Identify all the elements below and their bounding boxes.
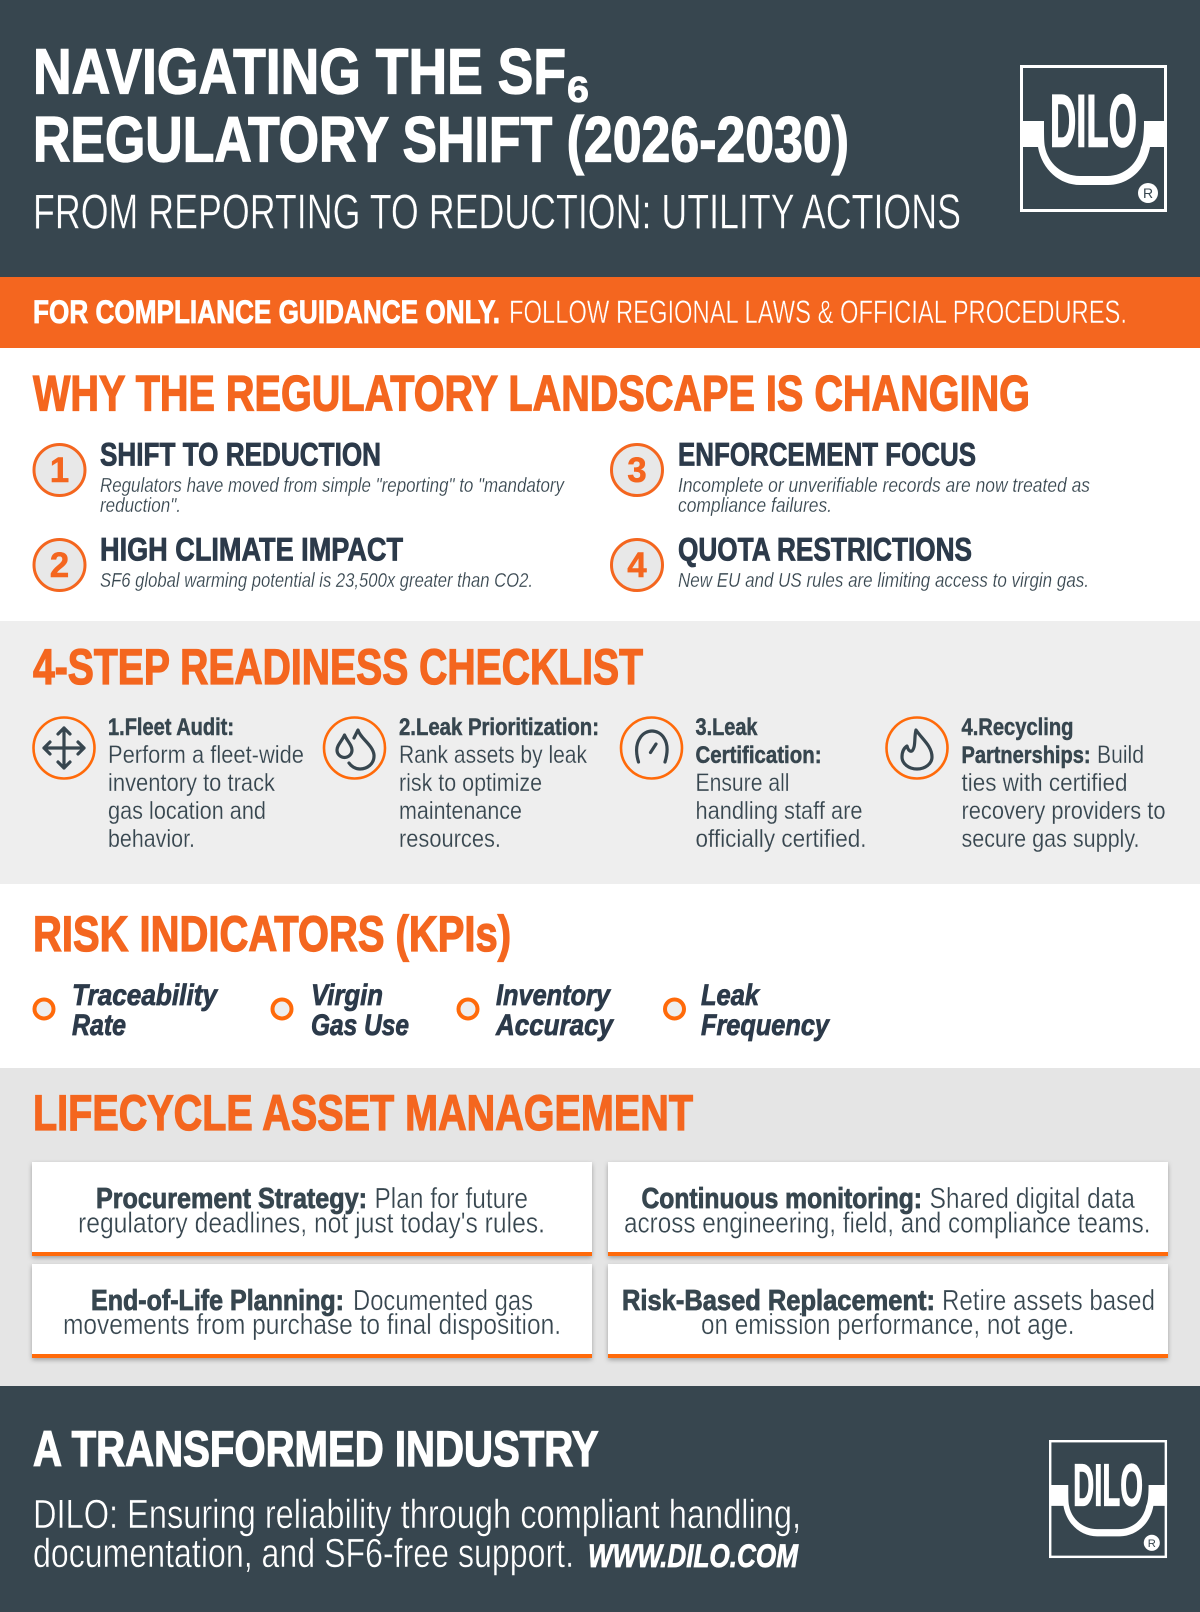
title xyxy=(33,36,849,176)
icon: gauge xyxy=(637,731,667,762)
footer heading: A TRANSFORMED INDUSTRY xyxy=(33,1421,598,1477)
card: risk-based replacement: on emission performance, not age. xyxy=(701,1309,1074,1341)
item 2 xyxy=(34,532,533,592)
item 4: QUOTA RESTRICTIONS xyxy=(678,532,972,568)
panel: risk indicators xyxy=(0,884,1200,1068)
step 1: gas location and xyxy=(108,797,266,825)
panel: footer xyxy=(0,1386,1200,1612)
card: continuous monitoring xyxy=(608,1162,1168,1256)
card: procurement strategy: Procurement Strategy: xyxy=(96,1183,367,1215)
item 1: Regulators have moved from simple "reporting" to "mandatory xyxy=(100,475,565,497)
item 1: 1 xyxy=(50,451,69,490)
step 4: ties with certified xyxy=(962,769,1128,797)
card: risk-based replacement xyxy=(608,1264,1168,1358)
card: end-of-life planning: Documented gas xyxy=(353,1285,533,1317)
card: continuous monitoring: Continuous monitoring: xyxy=(642,1183,922,1215)
title: 6 xyxy=(567,69,589,110)
KPI: inventory accuracy xyxy=(458,979,614,1042)
step 3: handling staff are xyxy=(696,797,862,825)
heading: LIFECYCLE ASSET MANAGEMENT xyxy=(33,1085,693,1141)
panel: readiness checklist xyxy=(0,621,1200,884)
step 4: recovery providers to xyxy=(962,797,1166,825)
step 2: Rank assets by leak xyxy=(399,741,587,769)
banner: compliance guidance: FOR COMPLIANCE GUIDANCE ONLY. xyxy=(33,294,500,330)
step 3 xyxy=(621,714,866,853)
card: end-of-life planning xyxy=(32,1264,592,1358)
item 1: reduction". xyxy=(100,495,181,517)
KPI: virgin gas use: Virgin xyxy=(311,979,383,1012)
KPI: leak frequency: Leak xyxy=(701,979,760,1012)
card: end-of-life planning: movements from purchase to final disposition. xyxy=(63,1309,561,1341)
step 3: officially certified. xyxy=(696,825,866,853)
item 3: Incomplete or unverifiable records are now treated as xyxy=(678,475,1090,497)
footer text: documentation, and SF6-free support. xyxy=(33,1530,574,1576)
KPI: virgin gas use: Gas Use xyxy=(311,1009,409,1042)
footer text xyxy=(33,1491,801,1576)
icon: water drops xyxy=(337,730,374,769)
title: NAVIGATING THE SF xyxy=(33,36,566,108)
step 2: maintenance xyxy=(399,797,522,825)
card: procurement strategy: Plan for future xyxy=(374,1183,528,1215)
item 1 xyxy=(34,436,565,517)
footer text: WWW.DILO.COM xyxy=(588,1538,799,1574)
step 1: Perform a fleet-wide xyxy=(108,741,304,769)
step 3: Certification: xyxy=(696,742,822,769)
item 4: New EU and US rules are limiting access to virgin gas. xyxy=(678,570,1089,592)
step 1: inventory to track xyxy=(108,769,275,797)
step 2: risk to optimize xyxy=(399,769,542,797)
KPI: inventory accuracy: Inventory xyxy=(496,979,611,1012)
heading: RISK INDICATORS (KPIs) xyxy=(33,906,511,962)
card: end-of-life planning: End-of-Life Planning: xyxy=(91,1285,344,1317)
step 1: 1.Fleet Audit: xyxy=(108,714,234,741)
KPI: virgin gas use xyxy=(272,979,409,1042)
item 1: SHIFT TO REDUCTION xyxy=(100,436,381,472)
card: continuous monitoring: Shared digital data xyxy=(930,1183,1136,1215)
item 3: 3 xyxy=(627,451,647,490)
KPI: traceability rate: Rate xyxy=(72,1009,126,1042)
step 4 xyxy=(886,714,1166,853)
KPI: traceability rate: Traceability xyxy=(72,979,218,1012)
step 2 xyxy=(324,714,599,853)
footer text: DILO: Ensuring reliability through compliant handling, xyxy=(33,1491,801,1537)
step 3: Ensure all xyxy=(696,769,790,797)
KPI: leak frequency xyxy=(665,979,830,1042)
step 1 xyxy=(34,714,304,853)
logo: DILO small xyxy=(1049,1441,1167,1557)
step 3: 3.Leak xyxy=(696,714,758,741)
item 2: 2 xyxy=(50,546,69,585)
item 4: 4 xyxy=(627,546,647,585)
item 3 xyxy=(612,436,1090,517)
logo: DILO xyxy=(1020,66,1167,210)
step 4: Build xyxy=(1097,741,1144,769)
card: risk-based replacement: Retire assets based xyxy=(942,1285,1155,1317)
step 2: 2.Leak Prioritization: xyxy=(399,714,599,741)
KPI: inventory accuracy: Accuracy xyxy=(495,1009,614,1042)
item 3: ENFORCEMENT FOCUS xyxy=(678,436,976,472)
step 2: resources. xyxy=(399,825,501,853)
panel: header xyxy=(0,0,1200,277)
logo: DILO: R xyxy=(1143,185,1153,201)
heading: 4-STEP READINESS CHECKLIST xyxy=(33,639,643,695)
KPI: leak frequency: Frequency xyxy=(701,1009,830,1042)
item 2: SF6 global warming potential is 23,500x greater than CO2. xyxy=(100,570,533,592)
item 3: compliance failures. xyxy=(678,495,832,517)
title: REGULATORY SHIFT (2026-2030) xyxy=(33,104,849,176)
card: risk-based replacement: Risk-Based Replacement: xyxy=(622,1285,935,1317)
logo: DILO small: R xyxy=(1148,1538,1156,1550)
card: procurement strategy xyxy=(32,1162,592,1256)
panel: lifecycle asset management xyxy=(0,1068,1200,1386)
banner: compliance guidance xyxy=(0,277,1200,348)
panel: why the landscape is changing xyxy=(0,348,1200,621)
step 1: behavior. xyxy=(108,825,195,853)
item 4 xyxy=(612,532,1089,592)
card: procurement strategy: regulatory deadlines, not just today's rules. xyxy=(78,1208,545,1240)
step 4: 4.Recycling xyxy=(962,714,1074,741)
step 4: secure gas supply. xyxy=(962,825,1140,853)
step 4: Partnerships: xyxy=(962,742,1090,769)
icon: flame xyxy=(902,730,932,769)
KPI: traceability rate xyxy=(34,979,218,1042)
item 2: HIGH CLIMATE IMPACT xyxy=(100,532,403,568)
icon: four-way arrows xyxy=(44,728,84,768)
